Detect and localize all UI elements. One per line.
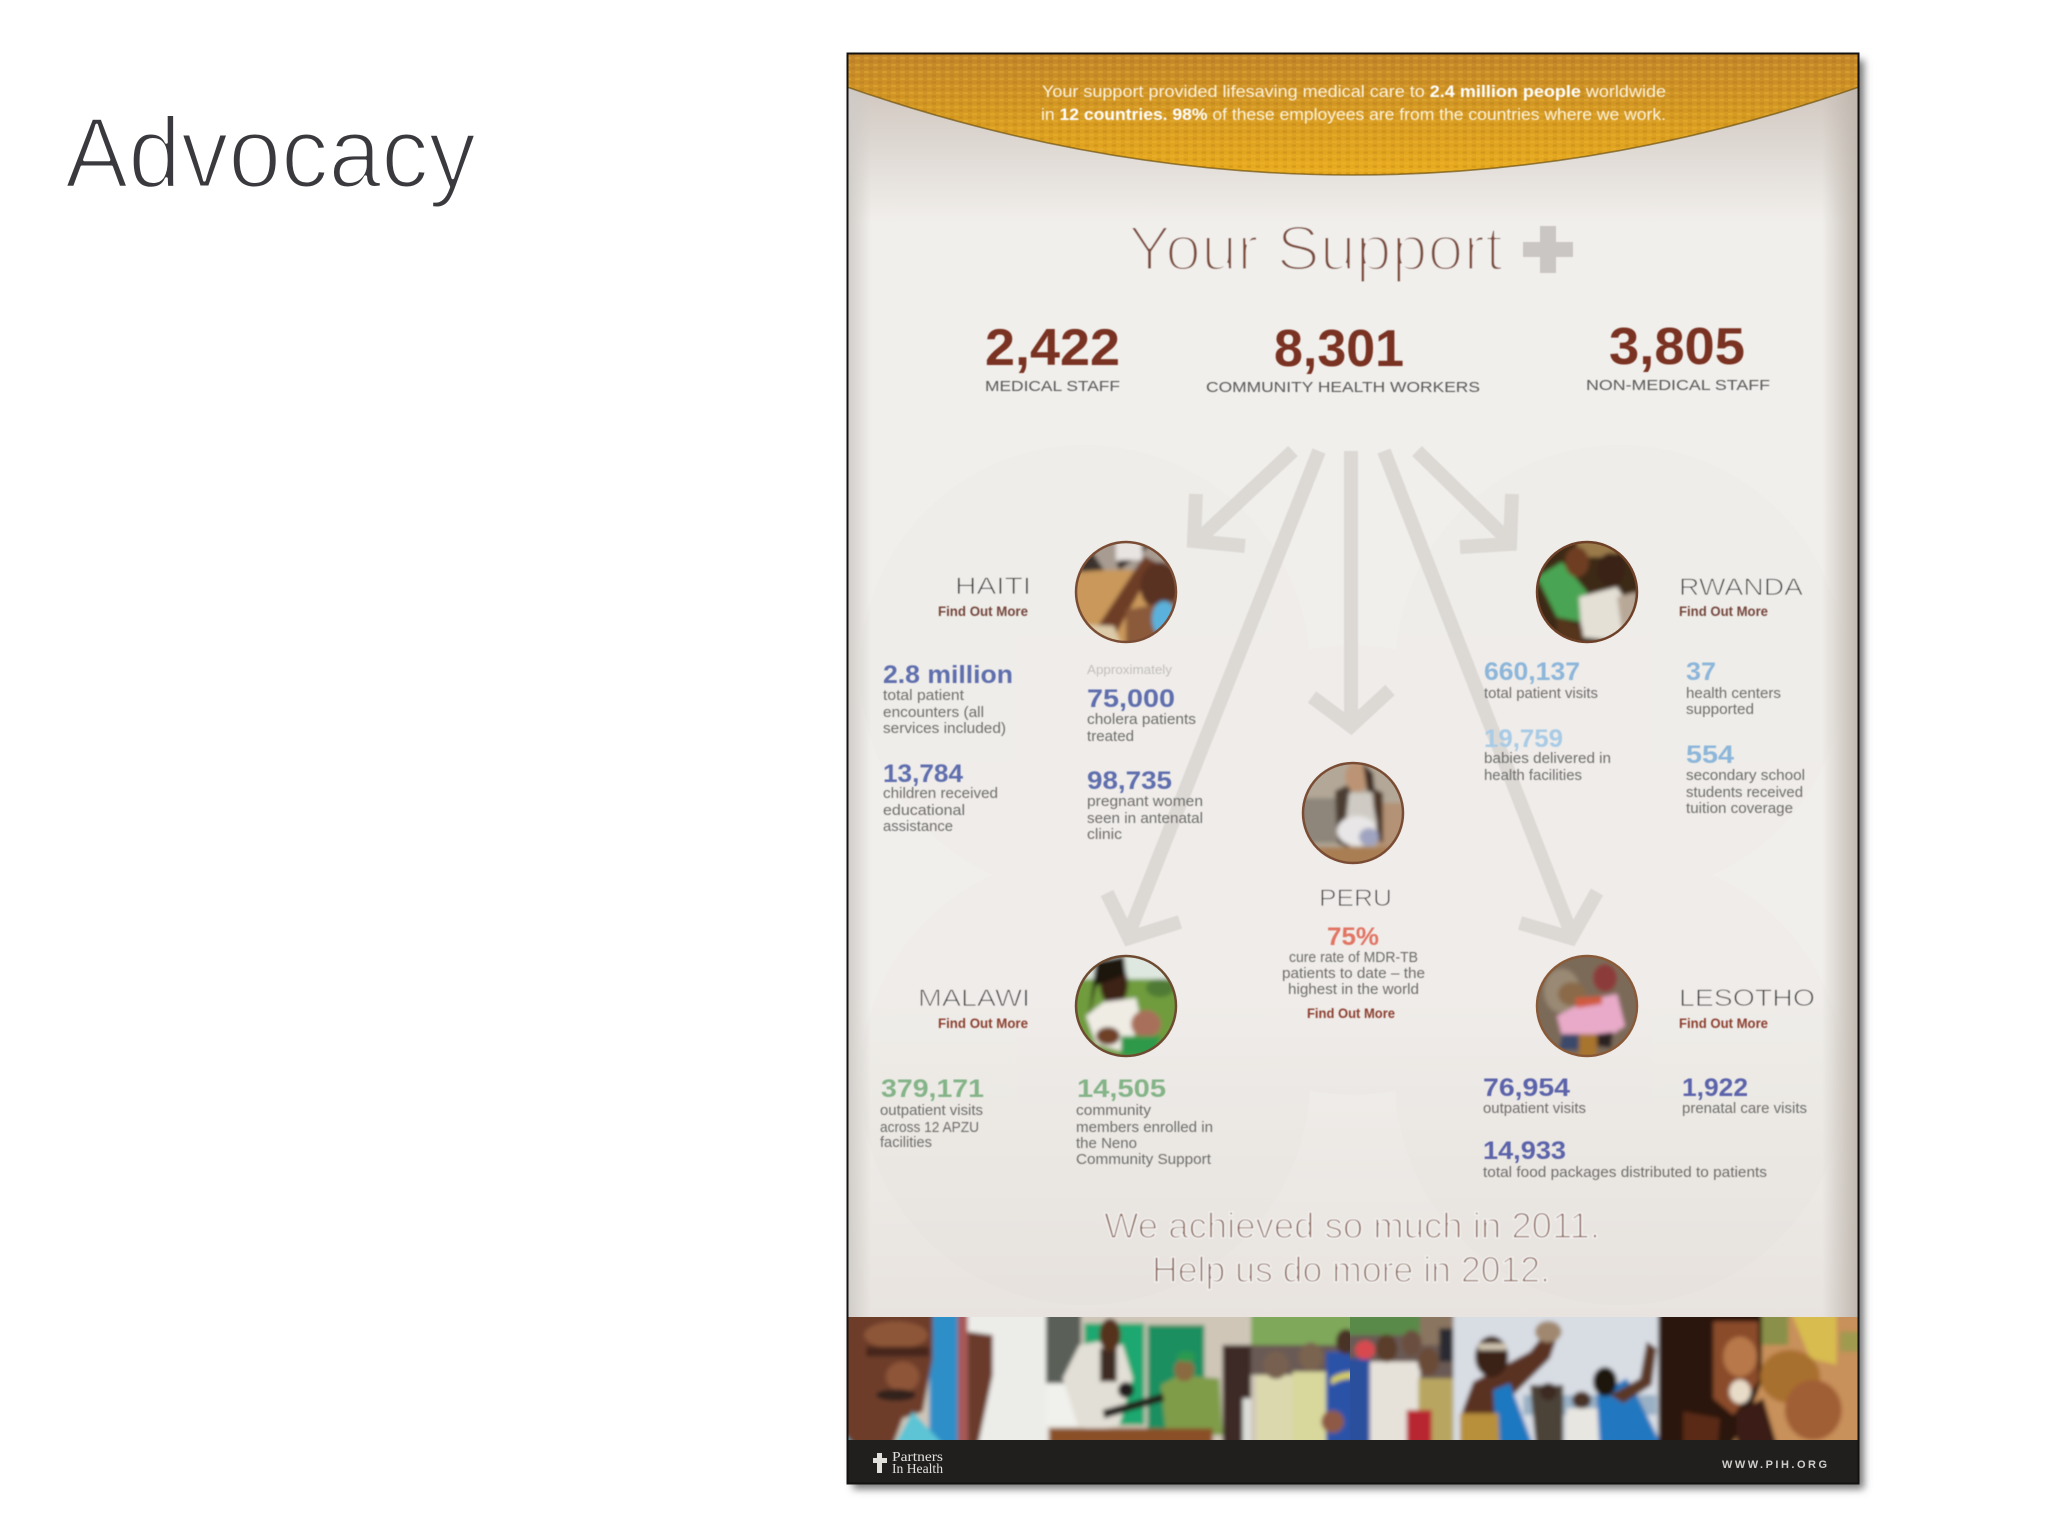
stat: 98,735: pregnant women bbox=[1087, 794, 1203, 810]
stat: 37: supported bbox=[1686, 702, 1754, 718]
stat: 2.8 million: total patient bbox=[883, 688, 964, 704]
photo: Rwanda bbox=[1536, 540, 1638, 644]
website: WWW.PIH.ORG bbox=[1722, 1459, 1827, 1471]
stat: community health workers: COMMUNITY HEALTH WORKERS bbox=[1206, 380, 1480, 396]
stat: 19,759: 19,759 bbox=[1484, 725, 1563, 753]
panel: Peru bbox=[1282, 758, 1425, 1021]
stat: 554 bbox=[1686, 741, 1805, 817]
stat: 75%: patients to date – the bbox=[1282, 966, 1425, 982]
stat: 19,759 bbox=[1484, 725, 1611, 784]
stat: 14,505: Community Support bbox=[1076, 1152, 1211, 1168]
country name: PERU bbox=[1319, 885, 1392, 912]
stat: 13,784: assistance bbox=[883, 819, 953, 835]
stat: 37 bbox=[1686, 658, 1781, 718]
panel: Lesotho bbox=[1483, 951, 1815, 1181]
stat: non-medical staff: 3,805 bbox=[1609, 318, 1745, 376]
arrow: Peru bbox=[1312, 451, 1390, 726]
stat: 13,784 bbox=[883, 760, 998, 835]
stat: 14,505 bbox=[1076, 1075, 1213, 1168]
country name and link: Find Out More bbox=[1679, 1016, 1768, 1031]
stat: 379,171: 379,171 bbox=[881, 1075, 984, 1103]
stat: 14,933 bbox=[1483, 1137, 1767, 1181]
stat: 14,933: total food packages distributed to patients bbox=[1483, 1165, 1767, 1181]
country name and link: MALAWI bbox=[918, 985, 1030, 1012]
arrow: Haiti bbox=[1194, 451, 1293, 546]
stat: 2.8 million: 2.8 million bbox=[883, 661, 1013, 689]
stat: non-medical staff bbox=[1586, 318, 1770, 394]
stat: 1,922: 1,922 bbox=[1682, 1074, 1748, 1102]
stat: 14,505: community bbox=[1076, 1103, 1152, 1119]
stat: 2.8 million: encounters (all bbox=[883, 705, 984, 721]
arrows to countries bbox=[1107, 451, 1597, 938]
stat: 660,137: 660,137 bbox=[1484, 658, 1580, 686]
photo: Haiti bbox=[1074, 540, 1178, 644]
logo: Partners In Health: In Health bbox=[892, 1462, 943, 1477]
stat: 76,954: outpatient visits bbox=[1483, 1101, 1586, 1117]
stat: 554: secondary school bbox=[1686, 768, 1805, 784]
stat: 75,000: cholera patients bbox=[1087, 712, 1196, 728]
stat: 75%: Find Out More bbox=[1307, 1006, 1395, 1021]
stat: 98,735: clinic bbox=[1087, 827, 1122, 843]
header message bbox=[1041, 83, 1666, 124]
stat: 379,171: across 12 APZU bbox=[880, 1120, 979, 1136]
stat: 660,137 bbox=[1484, 658, 1598, 702]
logo: Partners In Health: Partners bbox=[892, 1450, 943, 1465]
arrow: Rwanda bbox=[1417, 451, 1512, 547]
country name and link: Find Out More bbox=[938, 604, 1028, 619]
photo strip bbox=[848, 1317, 1858, 1440]
footer bar bbox=[847, 1440, 1859, 1483]
closing message: Help us do more in 2012. bbox=[1152, 1249, 1550, 1290]
stat: 98,735: 98,735 bbox=[1087, 767, 1172, 795]
photo: Peru bbox=[1302, 762, 1404, 864]
heading: Your Support: Your Support bbox=[1128, 214, 1504, 284]
country name and link bbox=[918, 985, 1030, 1031]
arrow: Malawi bbox=[1107, 451, 1319, 938]
stat: 19,759: health facilities bbox=[1484, 768, 1582, 784]
photo: Malawi bbox=[1074, 954, 1178, 1058]
stat: 2.8 million: services included) bbox=[883, 721, 1006, 737]
closing message: We achieved so much in 2011. bbox=[1104, 1205, 1600, 1246]
stat: 76,954 bbox=[1483, 1074, 1586, 1117]
stat: 37: health centers bbox=[1686, 686, 1781, 702]
panel: Malawi bbox=[880, 951, 1213, 1168]
country name and link: HAITI bbox=[955, 573, 1031, 600]
stat: 19,759: babies delivered in bbox=[1484, 751, 1611, 767]
closing message bbox=[1104, 1205, 1600, 1290]
panel: Rwanda bbox=[1484, 537, 1805, 817]
arrow: Lesotho bbox=[1384, 451, 1597, 938]
stat: community health workers bbox=[1206, 320, 1480, 396]
header message: in 12 countries. 98% of these employees are from the countries where we work. bbox=[1041, 106, 1666, 124]
stat: 1,922 bbox=[1682, 1074, 1807, 1117]
stat: 379,171: facilities bbox=[880, 1135, 932, 1151]
stat: medical staff: MEDICAL STAFF bbox=[985, 379, 1120, 395]
stat: 660,137: total patient visits bbox=[1484, 686, 1598, 702]
stat: 76,954: 76,954 bbox=[1483, 1074, 1570, 1102]
stat: 98,735 bbox=[1087, 767, 1203, 843]
stat: 98,735: seen in antenatal bbox=[1087, 811, 1203, 827]
stat: community health workers: 8,301 bbox=[1274, 320, 1404, 378]
stat: 13,784: 13,784 bbox=[883, 760, 963, 788]
stat: 13,784: children received bbox=[883, 786, 998, 802]
country name and link: RWANDA bbox=[1679, 574, 1803, 601]
stat: 75,000: Approximately bbox=[1087, 662, 1173, 677]
country name and link bbox=[1679, 574, 1803, 619]
stat: 379,171 bbox=[880, 1075, 984, 1151]
stat: 554: 554 bbox=[1686, 741, 1734, 769]
stat: 554: students received bbox=[1686, 785, 1803, 801]
poster background bbox=[847, 53, 1859, 1483]
stat: non-medical staff: NON-MEDICAL STAFF bbox=[1586, 378, 1770, 394]
stat: 75,000 bbox=[1087, 662, 1196, 745]
stat: 14,505: 14,505 bbox=[1077, 1075, 1166, 1103]
stat: 2.8 million bbox=[883, 661, 1013, 737]
logo: Partners In Health bbox=[873, 1450, 943, 1477]
stat: 75,000: 75,000 bbox=[1087, 685, 1175, 713]
country name and link: Find Out More bbox=[1679, 604, 1768, 619]
stat: 75% bbox=[1282, 923, 1425, 1021]
panel: Haiti bbox=[883, 537, 1203, 843]
stat: 75,000: treated bbox=[1087, 729, 1134, 745]
stat: 75%: 75% bbox=[1327, 923, 1379, 951]
country name and link: Find Out More bbox=[938, 1016, 1028, 1031]
stat: 75%: cure rate of MDR-TB bbox=[1289, 950, 1418, 966]
stat: 14,933: 14,933 bbox=[1483, 1137, 1566, 1165]
header message: Your support provided lifesaving medical care to 2.4 million people worldwide bbox=[1042, 83, 1666, 101]
staff totals bbox=[985, 318, 1770, 396]
stat: 14,505: the Neno bbox=[1076, 1136, 1137, 1152]
poster drop shadow bbox=[853, 60, 1864, 1489]
stat: 379,171: outpatient visits bbox=[880, 1103, 983, 1119]
photos: man portrait, clinic and children bbox=[848, 1317, 1350, 1440]
stat: medical staff: 2,422 bbox=[985, 319, 1120, 377]
photos: children, dancers and smiling couple bbox=[1350, 1317, 1858, 1440]
country name and link bbox=[1679, 985, 1815, 1031]
stat: 37: 37 bbox=[1686, 658, 1716, 686]
slide title: Advocacy bbox=[65, 97, 476, 209]
stat: 554: tuition coverage bbox=[1686, 801, 1793, 817]
country name and link bbox=[938, 573, 1031, 619]
photo: Lesotho bbox=[1536, 954, 1638, 1058]
stat: 14,505: members enrolled in bbox=[1076, 1120, 1213, 1136]
stat: 75%: highest in the world bbox=[1288, 982, 1419, 998]
gold woven header bbox=[847, 54, 1859, 175]
poster bbox=[833, 53, 1875, 1489]
country name and link: LESOTHO bbox=[1679, 985, 1815, 1012]
stat: 1,922: prenatal care visits bbox=[1682, 1101, 1807, 1117]
stat: 13,784: educational bbox=[883, 803, 965, 819]
icon: plus bbox=[1523, 226, 1573, 273]
